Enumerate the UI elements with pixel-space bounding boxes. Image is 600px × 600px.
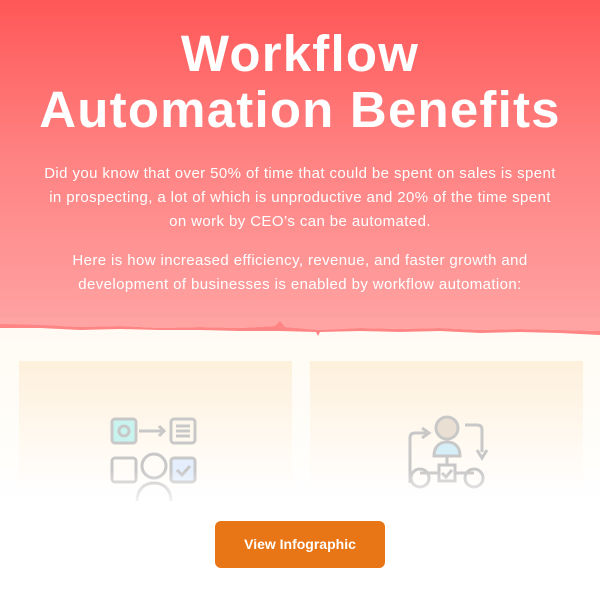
intro paragraph: Did you know that over 50% of time that could be spent on sales is spent [44, 165, 556, 182]
second paragraph: development of businesses is enabled by workflow automation: [78, 276, 522, 293]
button: View Infographic [244, 536, 356, 552]
panel: card 1 [19, 361, 292, 501]
bottom fade [0, 470, 600, 510]
lower background [0, 326, 600, 600]
torn edge [0, 321, 600, 336]
title [39, 25, 561, 138]
second paragraph: Here is how increased efficiency, revenue, and faster growth and [72, 252, 528, 269]
intro paragraph: on work by CEO’s can be automated. [169, 213, 431, 230]
icon: workflow person [110, 418, 196, 501]
title: Workflow [181, 25, 419, 82]
second paragraph [72, 252, 528, 293]
intro paragraph [44, 165, 556, 230]
title: Automation Benefits [39, 81, 561, 138]
intro paragraph: in prospecting, a lot of which is unproductive and 20% of the time spent [49, 189, 551, 206]
button [215, 521, 385, 568]
header background [0, 0, 600, 330]
icon: team flow [408, 416, 488, 488]
panel: card 2 [310, 361, 583, 501]
